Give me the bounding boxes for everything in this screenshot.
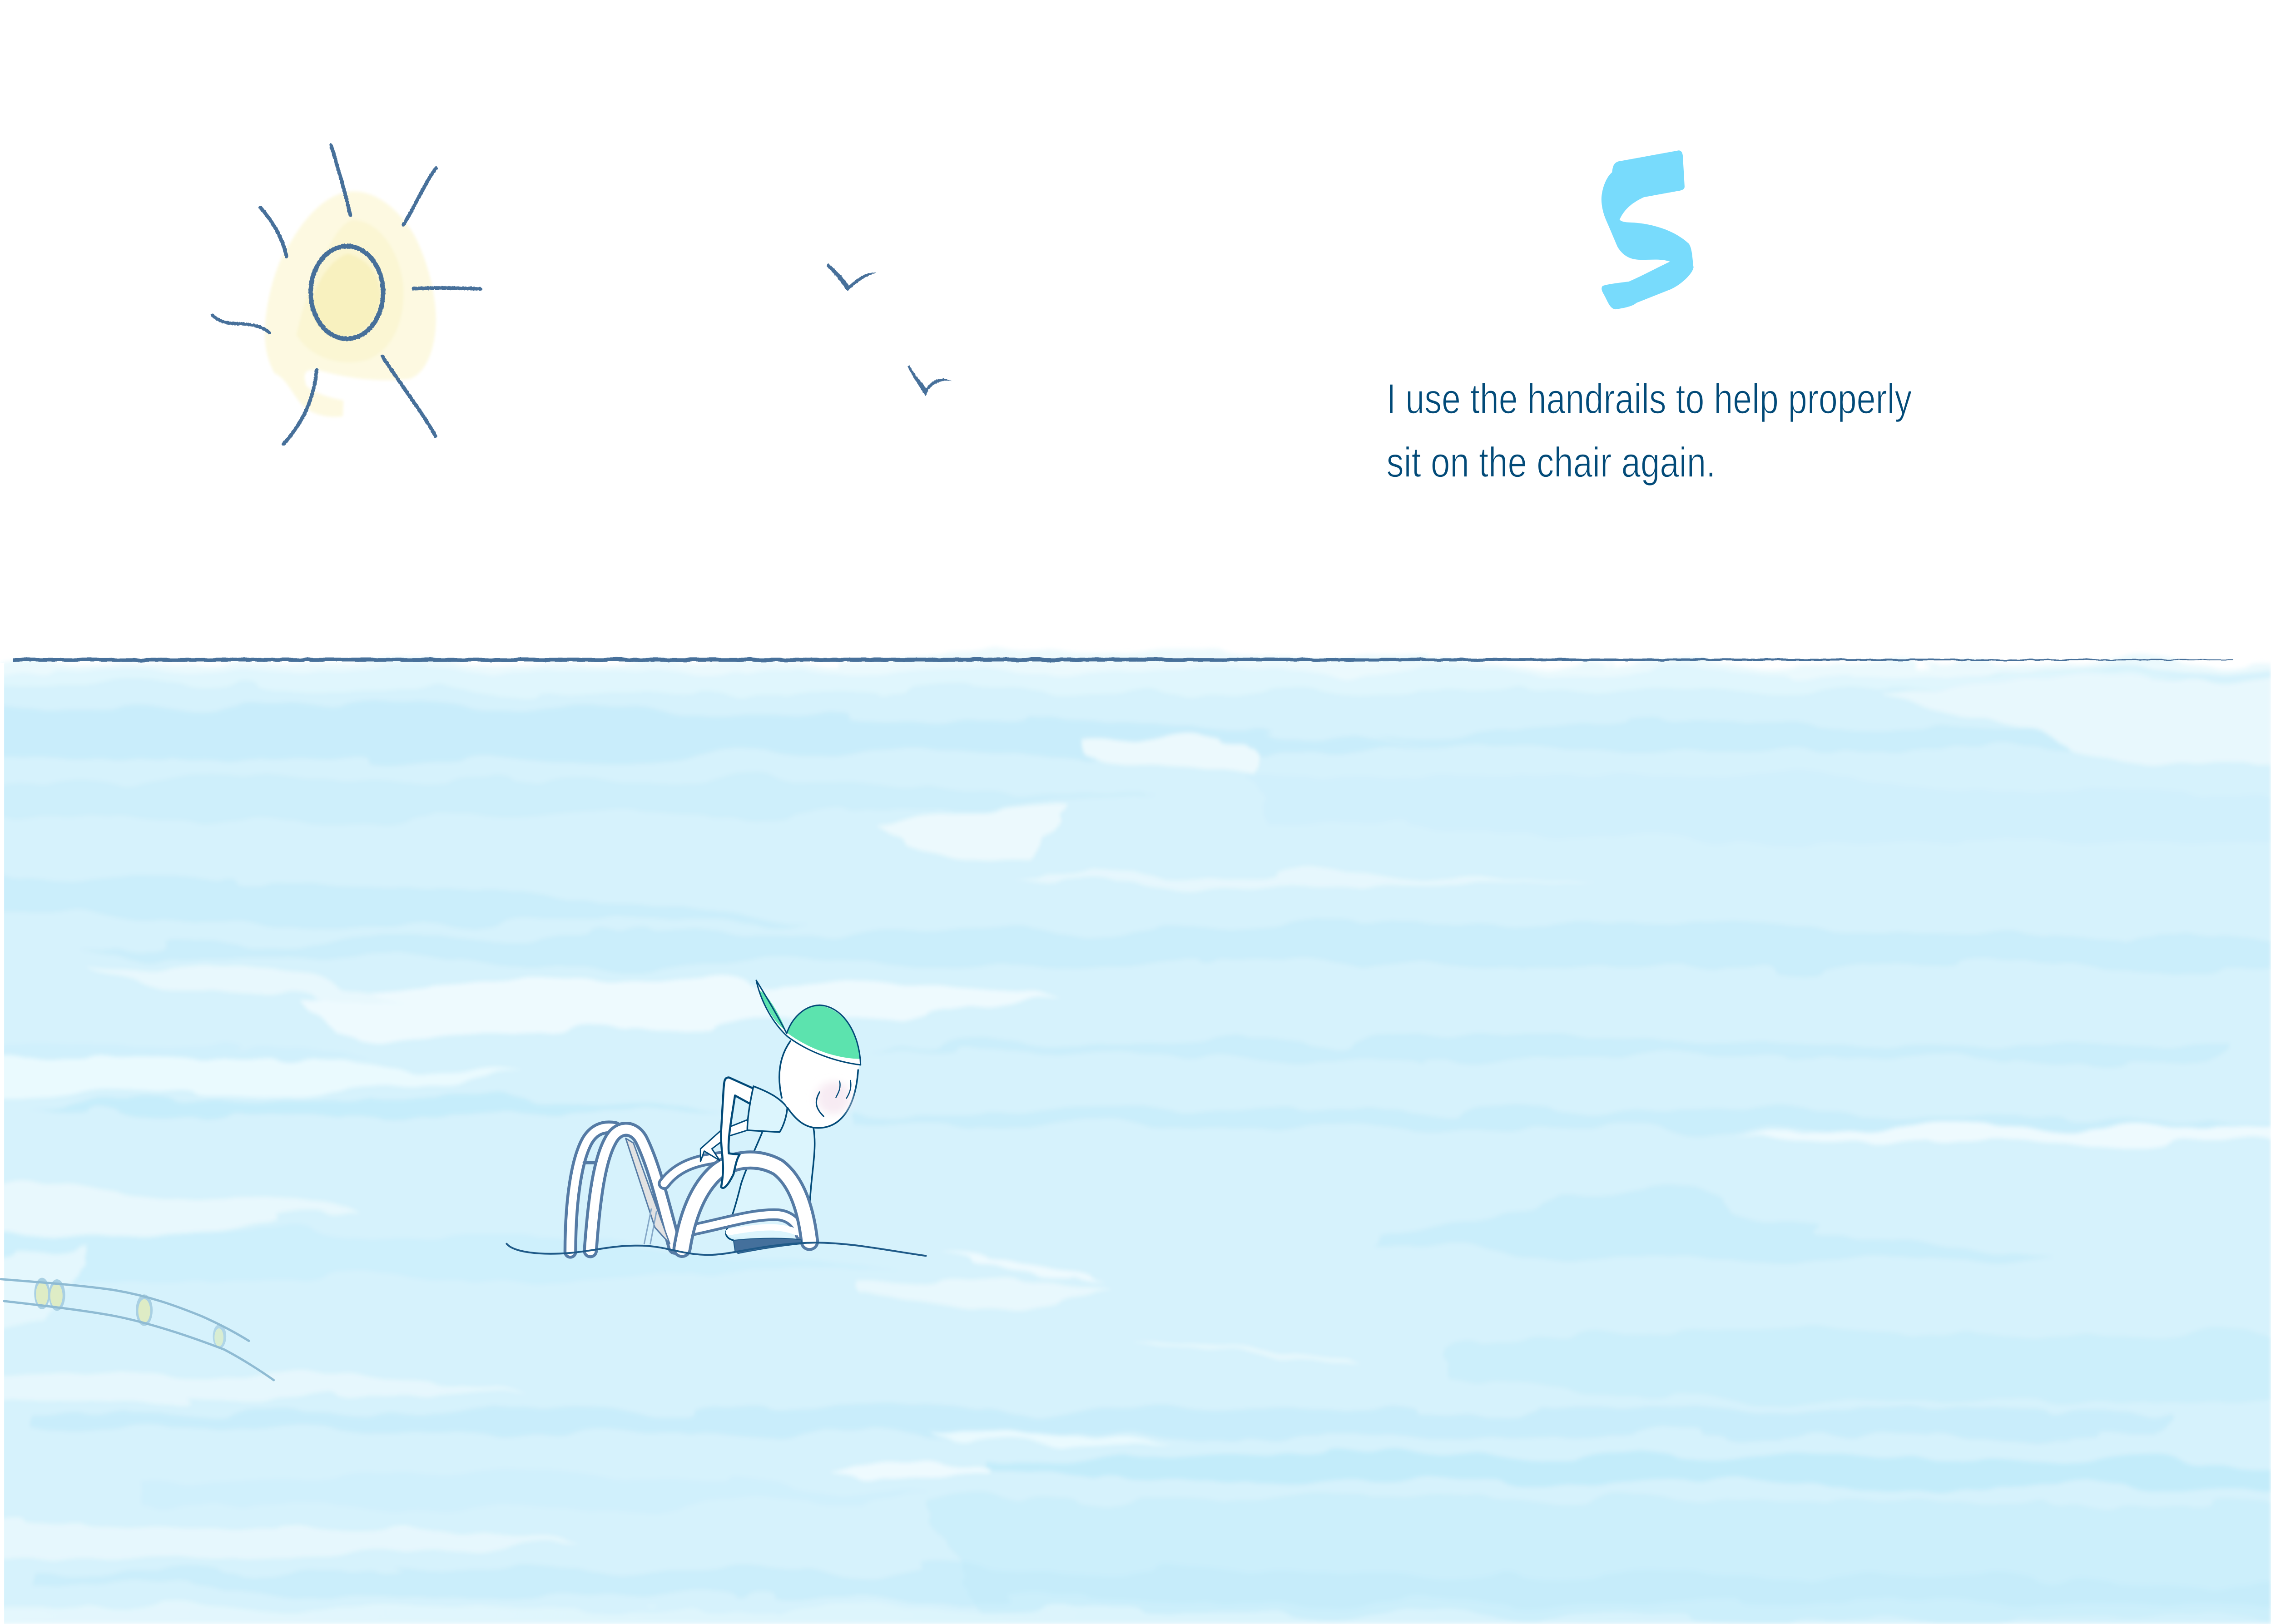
front chair arch: [682, 1160, 809, 1248]
step number 5: [1602, 150, 1694, 309]
ladder-back chair frame: [570, 1127, 675, 1252]
body and trousers: [724, 1109, 815, 1239]
caption text: sit on the chair again.: [1387, 439, 1716, 486]
smile and eyes: [816, 1080, 851, 1116]
distant handrail with floats: [1, 1278, 274, 1380]
sun: [213, 145, 481, 444]
birds: [827, 263, 952, 396]
seat bands: [692, 1215, 801, 1234]
watercolor sea: [0, 647, 2271, 1624]
front arm: [721, 1077, 754, 1188]
floats: [34, 1278, 226, 1348]
back armrest: [664, 1157, 726, 1183]
head: [779, 1040, 860, 1128]
rear chair leg: [644, 1209, 656, 1244]
sun glow: [265, 192, 436, 417]
left page margin: [0, 663, 4, 1624]
bird 2: [908, 365, 952, 396]
caption text: [1387, 376, 1912, 486]
sun circle: [311, 246, 383, 339]
rear arm: [700, 1120, 747, 1162]
sleeve: [747, 1086, 787, 1132]
horizon line: [13, 658, 2234, 662]
bird 1: [827, 263, 876, 292]
shoe: [734, 1238, 802, 1253]
figure on pool chair: [506, 980, 926, 1256]
rays: [213, 145, 481, 444]
green cap: [756, 980, 861, 1065]
chair seat panel: [626, 1139, 670, 1244]
caption text: I use the handrails to help properly: [1387, 376, 1912, 422]
cheek: [817, 1082, 850, 1114]
ground mound line: [506, 1243, 926, 1256]
rail lines: [1, 1279, 274, 1380]
sun outline and rays: [213, 145, 481, 444]
